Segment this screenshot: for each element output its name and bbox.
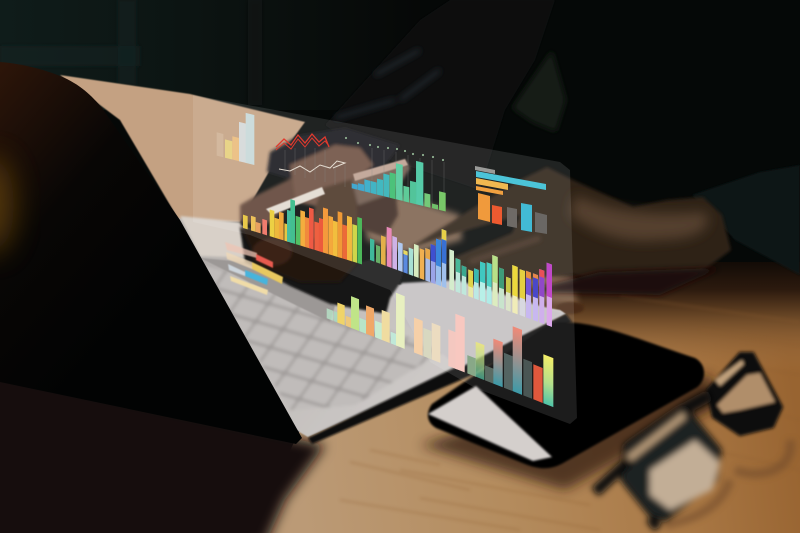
chart: bottom bars [327,253,553,407]
laptop underside edge [308,314,572,444]
chart: multicolour long bars [370,198,552,327]
dark shadow on left of desk [0,370,325,533]
chart: dot plot [345,137,444,161]
smartphone [420,322,720,490]
chart: orange red green bars [243,182,362,264]
trackpad pale region [392,280,563,368]
shirt sleeve and torso [325,0,800,275]
left hand holding stylus [240,128,410,282]
far lens [707,353,782,435]
near lens [595,395,720,528]
laptop keyboard deck [178,216,572,444]
chart: horizontal bars left [225,242,283,295]
fingertip over stylus [352,160,410,205]
room pillars [0,0,262,105]
laptop lid [0,62,302,444]
bright desk surface behind laptop [60,75,305,222]
lit tabletop between hands [362,195,462,255]
keys [197,260,445,410]
panel glass [193,95,577,424]
wooden desk [60,75,800,533]
chart: right horizontal and vertical bars [475,166,547,234]
eyeglasses [595,353,790,528]
chart: small pale bars top left [217,106,254,165]
glasses shadow [665,440,790,525]
hinge strip [200,258,335,322]
dim room top left [0,0,420,110]
dark shadow under hand [240,228,410,314]
chart: red zigzag line [276,134,329,150]
right hand on keyboard [410,167,731,295]
pale palm rest [180,216,252,258]
stylus [266,159,408,215]
chart: faint vertical grid [285,148,444,210]
lid warm glow [0,157,14,253]
chart: white trend line [279,161,345,172]
phone screen reflection [428,386,552,461]
chart: teal green bars [352,145,446,212]
holographic panel [193,95,577,424]
